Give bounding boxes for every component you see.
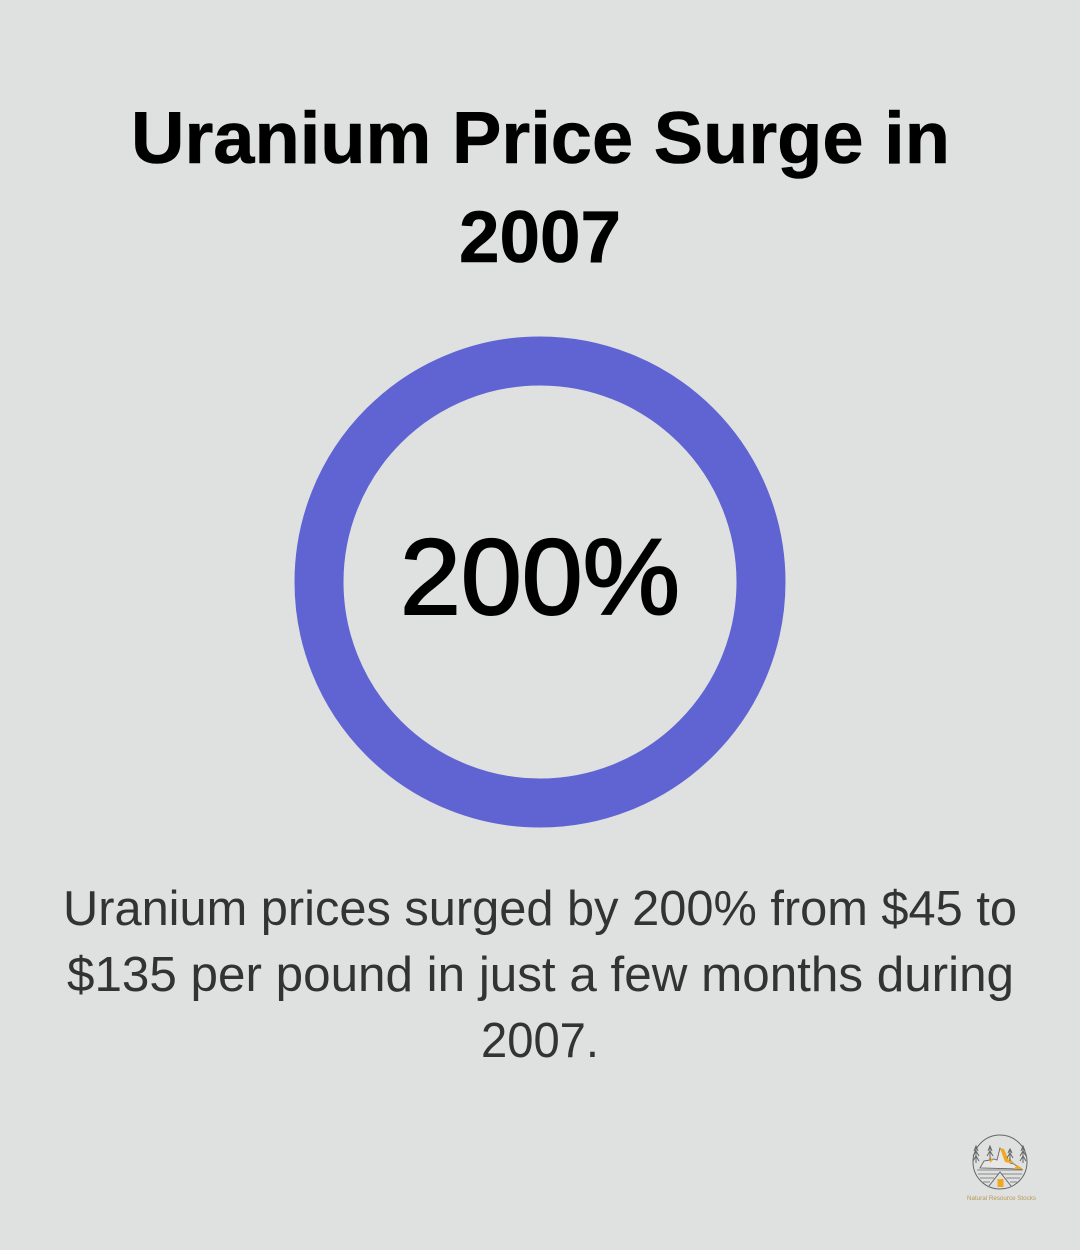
- title: Uranium Price Surge in: [131, 98, 950, 179]
- description text: 2007.: [481, 1014, 599, 1068]
- title: 2007: [459, 197, 621, 278]
- description text: $135 per pound in just a few months during: [67, 948, 1014, 1002]
- description text: Uranium prices surged by 200% from $45 to: [63, 882, 1017, 936]
- title: [131, 98, 950, 278]
- icon: cabin: [989, 1172, 1011, 1187]
- icon: mountains: [980, 1148, 1023, 1169]
- logo: Natural Resource Stocks: [967, 1135, 1036, 1202]
- icon: pine trees: [973, 1146, 1026, 1163]
- logo wordmark: Natural Resource Stocks: [967, 1195, 1036, 1202]
- donut ring: [319, 361, 761, 803]
- icon: water lines: [977, 1170, 1023, 1182]
- description text: [63, 882, 1017, 1068]
- percentage value: 200%: [400, 516, 680, 637]
